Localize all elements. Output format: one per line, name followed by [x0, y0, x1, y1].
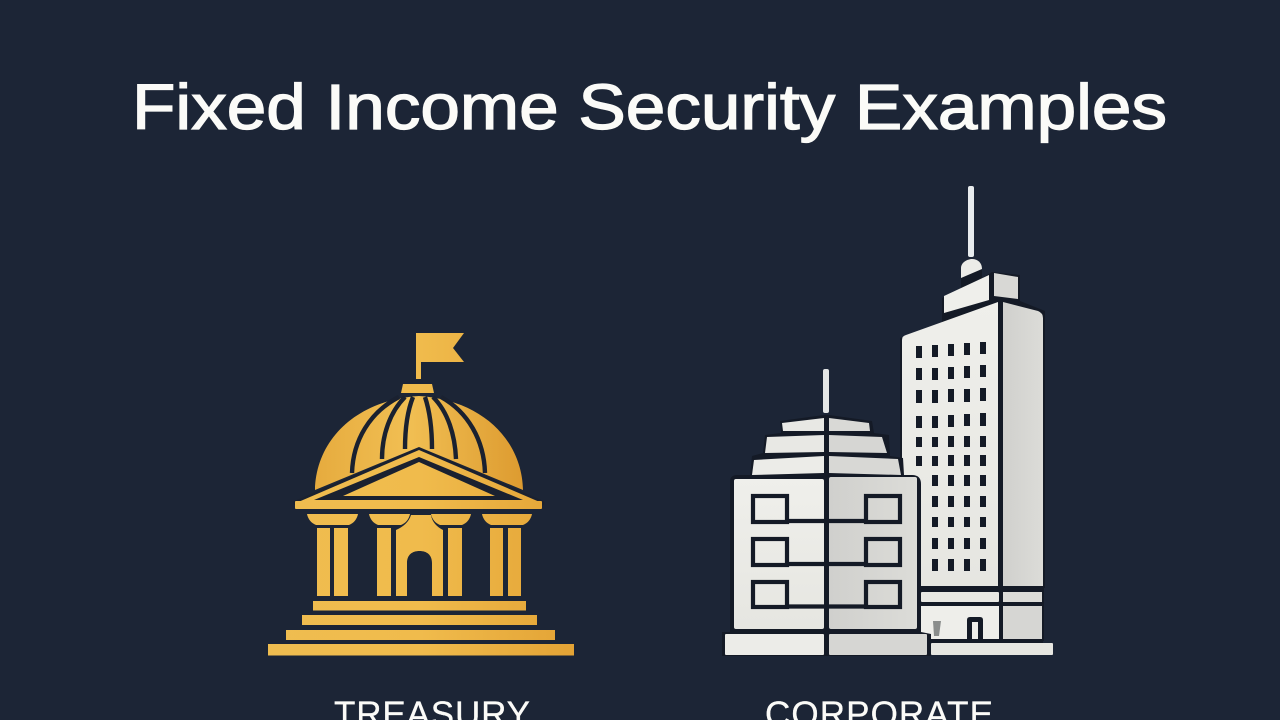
steps — [268, 601, 574, 656]
tower base — [921, 592, 999, 602]
flag — [416, 333, 464, 379]
icon: corporate towers — [722, 186, 1053, 656]
tall tower — [900, 186, 1053, 655]
pediment — [295, 450, 542, 509]
colonnade — [307, 514, 532, 596]
tower windows — [916, 342, 986, 571]
low building — [722, 369, 931, 656]
title: Fixed Income Security Examples — [132, 71, 1167, 143]
dome — [315, 384, 523, 490]
icon: treasury building — [268, 333, 574, 656]
low building windows — [753, 496, 900, 607]
